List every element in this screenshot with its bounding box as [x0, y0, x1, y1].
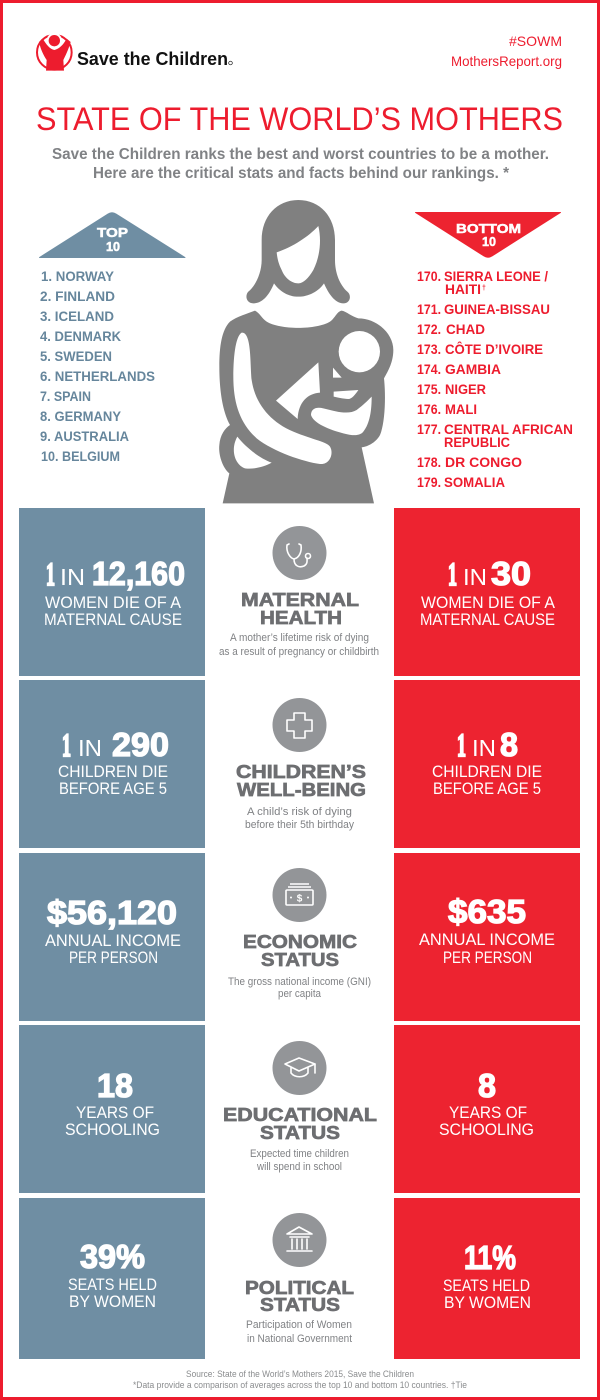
panel: children's well-being description: CHILDREN’S [236, 761, 366, 782]
bottom 10 list: 171. [417, 302, 441, 317]
bottom 10 list: CÔTE D’IVOIRE [445, 342, 543, 357]
panel: top 10 seats held: 39% [80, 1238, 145, 1275]
panel: political status description: in National Government [247, 1333, 352, 1345]
panel: maternal health description: HEALTH [260, 607, 342, 628]
top 10 list: 7. SPAIN [40, 389, 91, 404]
panel: bottom 10 income: $635 [448, 893, 526, 930]
panel: top 10 maternal health: 12,160 [92, 555, 185, 592]
bottom 10 list: 176. [417, 402, 441, 417]
panel: economic status description: STATUS [261, 949, 339, 970]
panel: educational status description: Expected time children [250, 1148, 349, 1160]
hashtag and website: MothersReport.org [451, 53, 562, 69]
panel: top 10 income: PER PERSON [69, 949, 158, 967]
top 10 triangle [40, 213, 185, 258]
bottom 10 triangle: BOTTOM [456, 222, 521, 236]
panel: top 10 income: ANNUAL INCOME [45, 932, 181, 950]
panel: top 10 maternal health [19, 508, 205, 676]
bottom 10 list: DR CONGO [445, 455, 522, 470]
panel: bottom 10 income [394, 853, 580, 1021]
top 10 list: 2. FINLAND [40, 289, 115, 304]
panel: economic status description [228, 868, 371, 1000]
panel: maternal health description: A mother’s lifetime risk of dying [230, 632, 369, 644]
panel: top 10 income: $56,120 [47, 894, 177, 931]
bottom 10 list: 174. [417, 362, 441, 377]
panel: top 10 maternal health: MATERNAL CAUSE [44, 611, 182, 629]
panel: political status description [245, 1213, 354, 1345]
bottom 10 list: SOMALIA [444, 475, 505, 490]
panel: economic status description: The gross national income (GNI) [228, 976, 371, 988]
panel: bottom 10 schooling: SCHOOLING [439, 1121, 534, 1139]
bottom 10 list: 179. [417, 475, 441, 490]
panel: top 10 seats held: SEATS HELD [68, 1276, 157, 1294]
top 10 list: 3. ICELAND [40, 309, 114, 324]
bottom 10 list: REPUBLIC [444, 435, 510, 450]
panel: bottom 10 child mortality: CHILDREN DIE [432, 763, 542, 781]
top 10 triangle: TOP [97, 226, 128, 240]
icon: mother holding child [219, 200, 393, 503]
icon: graduation cap [285, 1058, 315, 1077]
panel: top 10 maternal health: IN [60, 564, 85, 590]
footnotes: Source: State of the World’s Mothers 2015, Save the Children [186, 1369, 414, 1379]
panel: bottom 10 child mortality: IN [472, 735, 496, 761]
panel: bottom 10 maternal health: MATERNAL CAUSE [420, 611, 555, 629]
bottom 10 list [417, 269, 573, 490]
icon: banknotes: $ [297, 894, 303, 904]
panel: bottom 10 seats held: BY WOMEN [444, 1294, 531, 1312]
top 10 list: 1. NORWAY [41, 269, 114, 284]
bottom 10 list: 170. [417, 269, 441, 284]
panel: political status description: POLITICAL [245, 1277, 354, 1298]
panel: bottom 10 maternal health: 30 [491, 555, 531, 592]
top 10 list: 8. GERMANY [40, 409, 121, 424]
top 10 list: 5. SWEDEN [40, 349, 112, 364]
bottom 10 list: GUINEA-BISSAU [444, 302, 550, 317]
bottom 10 list: HAITI [445, 282, 481, 297]
logo: Save the Children [37, 33, 232, 71]
panel: top 10 schooling: YEARS OF [76, 1104, 154, 1122]
icon: stethoscope [287, 544, 310, 567]
bottom 10 list: 175. [417, 382, 441, 397]
bottom 10 list: NIGER [445, 382, 486, 397]
panel: educational status description: STATUS [260, 1122, 340, 1143]
panel: bottom 10 child mortality: 1 [457, 728, 466, 764]
bottom 10 list: SIERRA LEONE / [444, 269, 548, 284]
panel: top 10 child mortality: CHILDREN DIE [58, 763, 168, 781]
panel: children's well-being description: A child’s risk of dying [247, 806, 352, 818]
bottom 10 list: † [482, 285, 486, 292]
panel: top 10 schooling: SCHOOLING [65, 1121, 160, 1139]
panel: bottom 10 seats held [394, 1198, 580, 1359]
top 10 triangle: 10 [106, 240, 120, 254]
hashtag and website: #SOWM [509, 33, 562, 49]
panel: bottom 10 income: PER PERSON [443, 949, 532, 967]
bottom 10 list: MALI [445, 402, 477, 417]
panel: economic status description: per capita [278, 988, 321, 1000]
panel: bottom 10 maternal health: IN [463, 564, 487, 590]
subtitle: Here are the critical stats and facts behind our rankings. * [93, 165, 510, 182]
top 10 list: 6. NETHERLANDS [40, 369, 155, 384]
title: STATE OF THE WORLD’S MOTHERS [36, 101, 563, 137]
panel: economic status description: ECONOMIC [243, 931, 357, 952]
subtitle [52, 146, 549, 182]
footnotes: *Data provide a comparison of averages across the top 10 and bottom 10 countries. †Tie [133, 1380, 467, 1390]
icon: banknotes [286, 884, 313, 905]
top 10 list: 9. AUSTRALIA [40, 429, 129, 444]
bottom 10 list: CHAD [446, 322, 485, 337]
hashtag and website [451, 33, 562, 69]
panel: top 10 maternal health: WOMEN DIE OF A [45, 594, 181, 612]
panel: top 10 income [19, 853, 205, 1021]
panel: maternal health description: as a result of pregnancy or childbirth [219, 646, 379, 658]
panel: children's well-being description [236, 698, 366, 831]
icon: government building [287, 1227, 312, 1251]
panel: top 10 child mortality: IN [78, 735, 102, 761]
panel: bottom 10 maternal health [394, 508, 580, 676]
panel: bottom 10 maternal health: 1 [448, 557, 457, 593]
panel: maternal health description: MATERNAL [241, 589, 359, 610]
subtitle: Save the Children ranks the best and worst countries to be a mother. [52, 146, 549, 163]
bottom 10 list: 172. [417, 322, 441, 337]
panel: top 10 schooling: 18 [97, 1067, 133, 1104]
panel: educational status description: EDUCATIONAL [223, 1104, 377, 1125]
panel: top 10 child mortality: 290 [112, 726, 169, 763]
panel: children's well-being description: before their 5th birthday [245, 819, 355, 831]
panel: bottom 10 schooling: 8 [478, 1067, 496, 1104]
panel: top 10 child mortality: BEFORE AGE 5 [59, 780, 167, 798]
panel: top 10 child mortality: 1 [62, 728, 71, 764]
panel: bottom 10 child mortality [394, 680, 580, 848]
panel: educational status description: will spend in school [256, 1161, 342, 1173]
panel: bottom 10 schooling: YEARS OF [449, 1104, 527, 1122]
panel: children's well-being description: WELL-BEING [237, 779, 366, 800]
panel: bottom 10 maternal health: WOMEN DIE OF A [421, 594, 555, 612]
top 10 list [40, 269, 155, 464]
panel: political status description: STATUS [260, 1294, 340, 1315]
bottom 10 list: 178. [417, 455, 441, 470]
bottom 10 triangle: 10 [482, 235, 496, 249]
panel: bottom 10 child mortality: 8 [500, 726, 518, 763]
bottom 10 triangle [416, 212, 560, 257]
icon: medical cross [287, 713, 312, 738]
panel: bottom 10 income: ANNUAL INCOME [419, 931, 555, 949]
panel: top 10 seats held [19, 1198, 205, 1359]
panel: political status description: Participation of Women [246, 1319, 352, 1331]
panel: bottom 10 schooling [394, 1025, 580, 1193]
bottom 10 list: 177. [417, 422, 441, 437]
panel: bottom 10 seats held: 11% [464, 1239, 516, 1276]
top 10 list: 4. DENMARK [40, 329, 121, 344]
panel: top 10 schooling [19, 1025, 205, 1193]
logo: Save the Children: Save the Children [77, 48, 228, 69]
panel: top 10 maternal health: 1 [46, 557, 55, 593]
panel: bottom 10 child mortality: BEFORE AGE 5 [433, 780, 541, 798]
bottom 10 list: 173. [417, 342, 441, 357]
panel: educational status description [223, 1041, 377, 1173]
panel: bottom 10 seats held: SEATS HELD [443, 1277, 530, 1295]
bottom 10 list: CENTRAL AFRICAN [444, 422, 573, 437]
bottom 10 list: GAMBIA [445, 362, 501, 377]
panel: maternal health description [219, 526, 379, 658]
footnotes [133, 1369, 467, 1390]
panel: top 10 child mortality [19, 680, 205, 848]
panel: top 10 seats held: BY WOMEN [69, 1293, 156, 1311]
top 10 list: 10. BELGIUM [41, 449, 120, 464]
